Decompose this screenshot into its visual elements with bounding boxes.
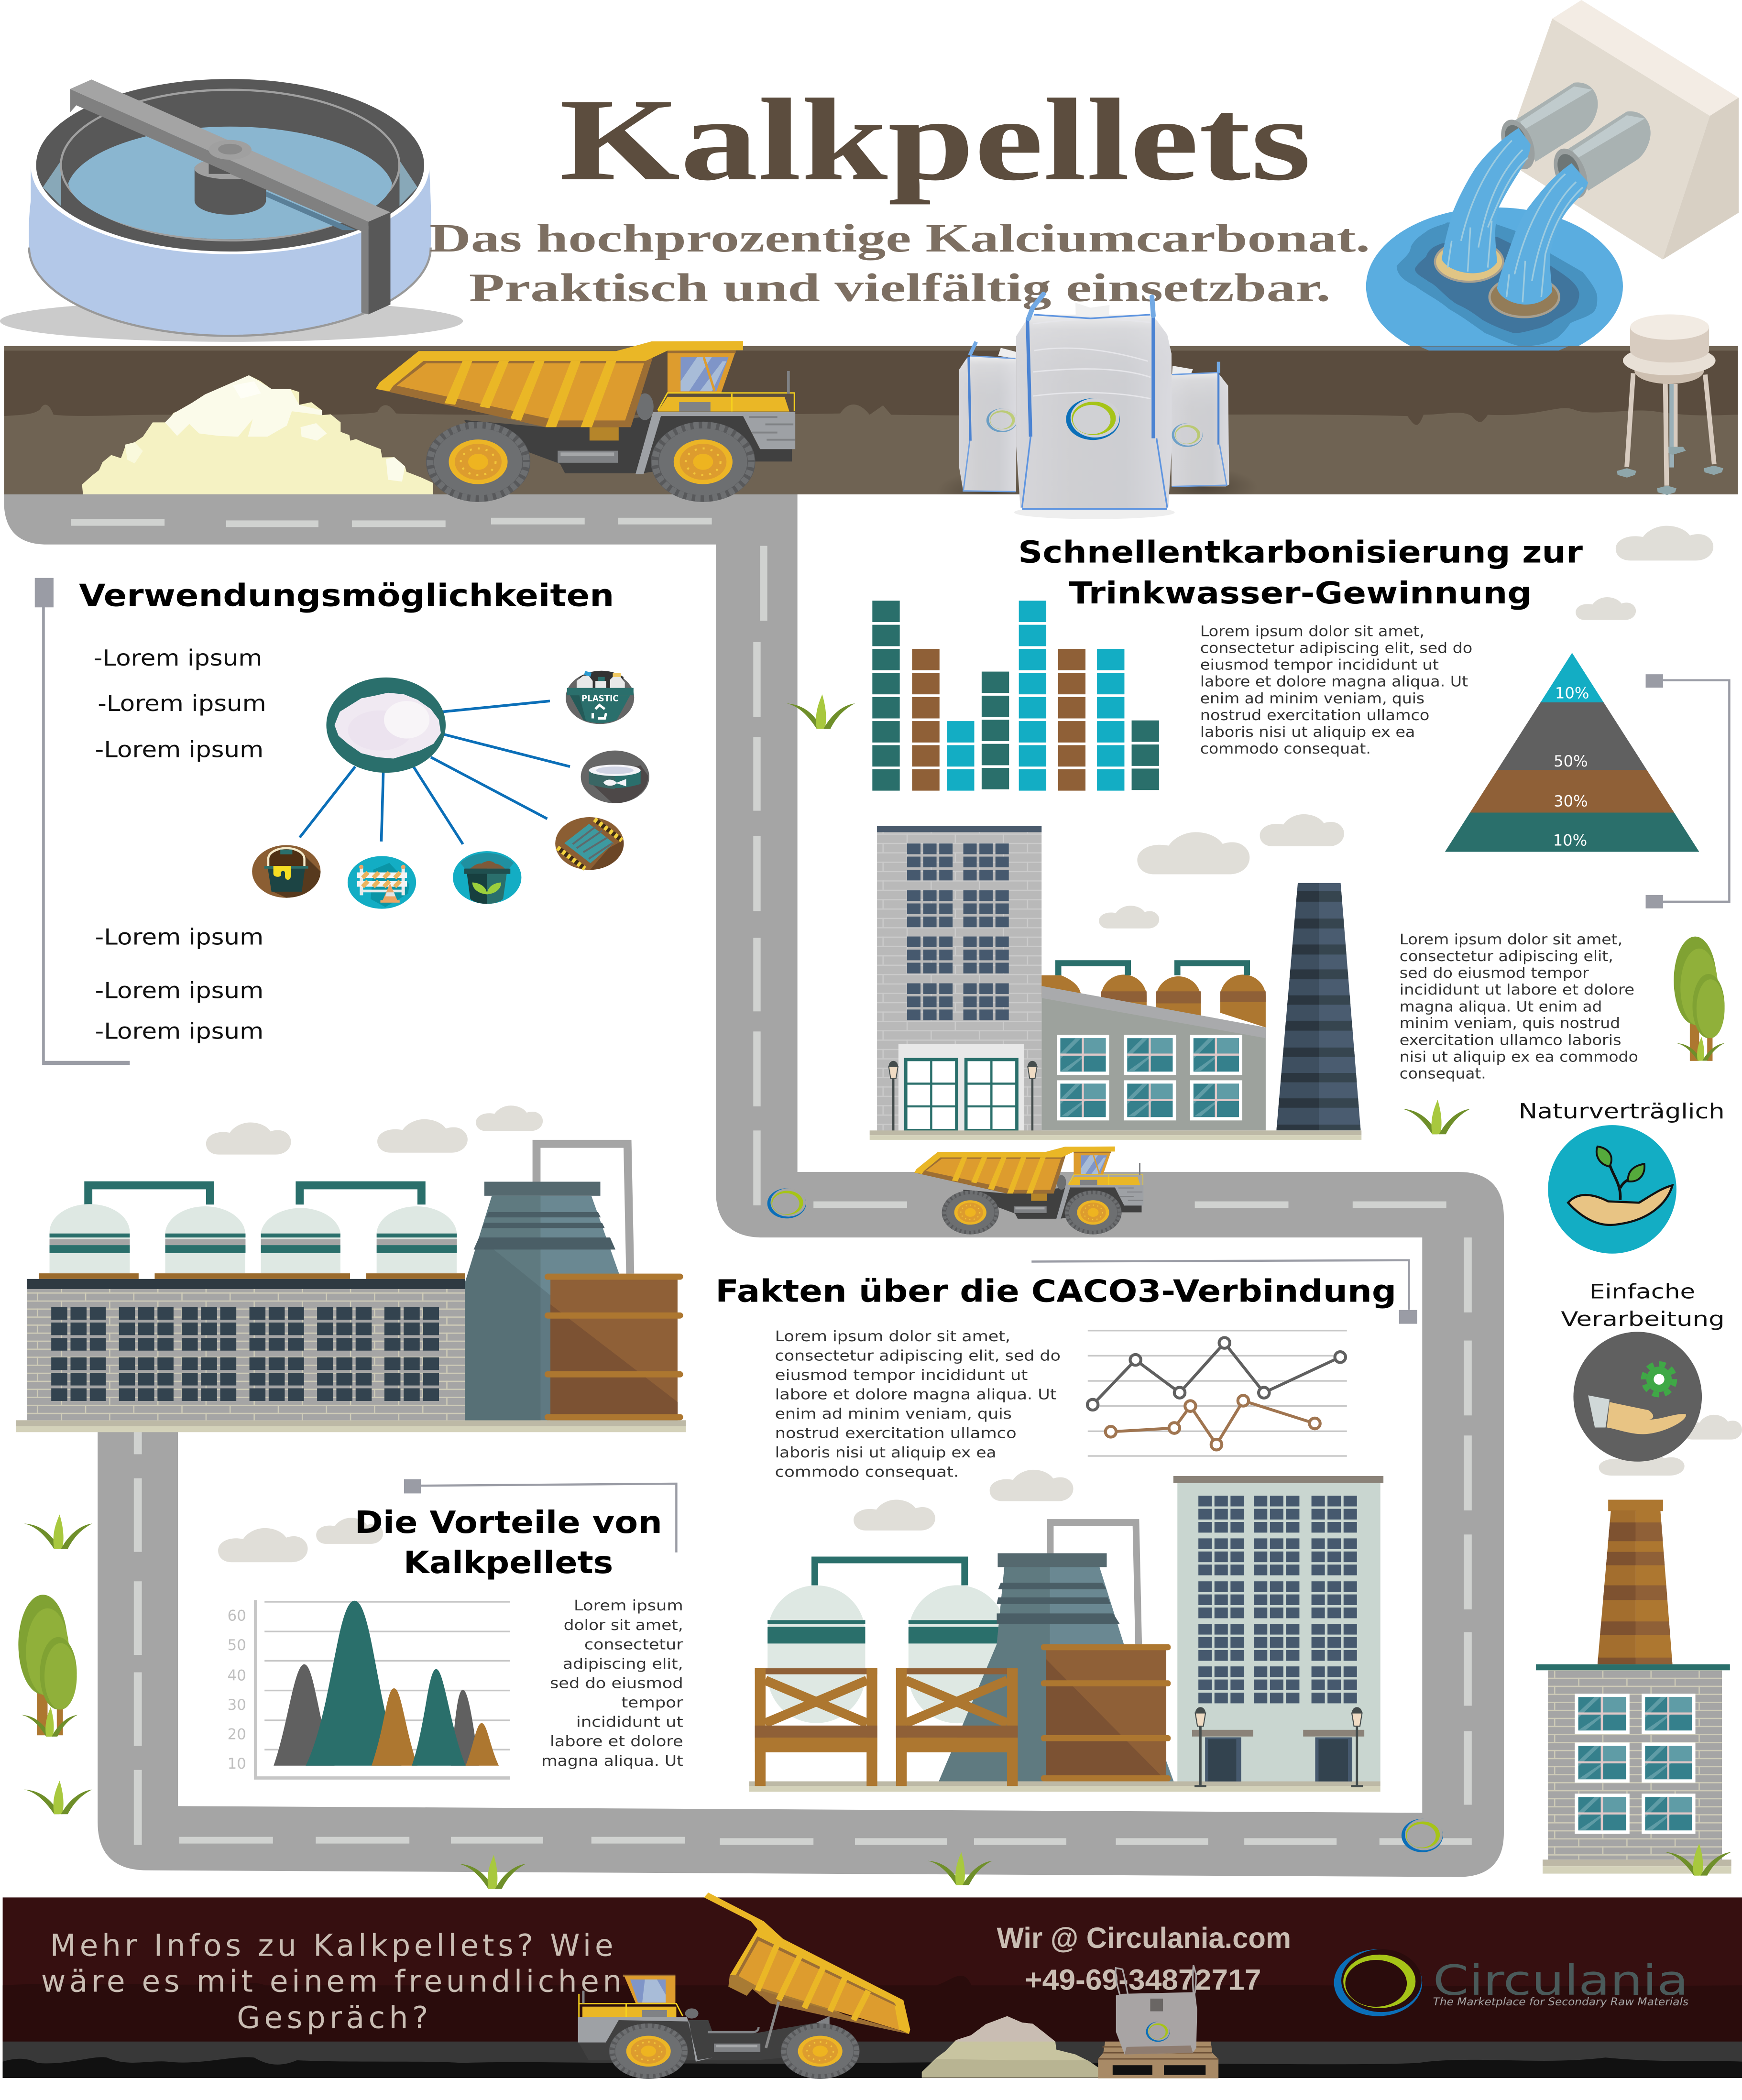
- icon: plastic: PLASTIC: [581, 694, 619, 704]
- text block: consectetur adipiscing elit, sed do: [775, 1348, 1061, 1365]
- road lane markings: [71, 518, 1472, 1845]
- icon: carpet: [555, 817, 624, 870]
- heading: [354, 1505, 662, 1581]
- illustration: wastewater outfall: [1366, 0, 1739, 365]
- pyramid chart: 30%: [1554, 792, 1588, 810]
- footer call to action: wäre es mit einem freundlichen: [41, 1964, 622, 1999]
- heading: Verwendungsmöglichkeiten: [79, 578, 614, 613]
- big bags: [937, 303, 1258, 519]
- list: -Lorem ipsum: [95, 924, 263, 950]
- icon: hand with plant: [1548, 1125, 1676, 1254]
- text block: sed do eiusmod tempor: [1400, 965, 1589, 982]
- list: -Lorem ipsum: [98, 690, 266, 716]
- pyramid chart: 50%: [1554, 752, 1588, 770]
- road: [4, 493, 1504, 1877]
- heading: Kalkpellets: [404, 1545, 613, 1581]
- footer contact: [997, 1922, 1291, 1996]
- text block: consectetur: [584, 1636, 683, 1653]
- list: -Lorem ipsum: [94, 645, 262, 671]
- pellet pile: [922, 2016, 1102, 2078]
- bracket: [35, 578, 130, 1065]
- panel: Die Vorteile von Kalkpellets: [228, 1479, 683, 1778]
- grass tuft: [1665, 1844, 1731, 1876]
- Circulania logo: [1334, 1949, 1688, 2016]
- Circulania logo: The Marketplace for Secondary Raw Materials: [1433, 1996, 1688, 2008]
- connector lines: [300, 701, 570, 844]
- heading: [1018, 535, 1583, 611]
- pyramid chart: 10%: [1555, 684, 1589, 702]
- text block: adipiscing elit,: [563, 1656, 683, 1673]
- text block: labore et dolore magna aliqua. Ut: [1200, 674, 1468, 690]
- label: Naturverträglich: Naturverträglich: [1519, 1100, 1725, 1124]
- footer band: [3, 1897, 1742, 2078]
- label: Einfache Verarbeitung: Einfache: [1589, 1280, 1695, 1303]
- bracket: [404, 1479, 676, 1553]
- text block: incididunt ut: [576, 1714, 683, 1731]
- factory: left plant: [16, 1144, 686, 1432]
- illustration: clarifier tank: [0, 77, 463, 342]
- area chart: [228, 1600, 510, 1778]
- footer contact: Wir @ Circulania.com: [997, 1922, 1291, 1955]
- area chart: 60: [228, 1608, 246, 1625]
- icon: plant substrate: [453, 851, 521, 904]
- clouds: [206, 526, 1742, 1562]
- icon: powder centre: [326, 678, 446, 773]
- text block: enim ad minim veniam, quis: [1200, 690, 1424, 707]
- text block: [1200, 623, 1472, 757]
- bracket: [1646, 674, 1729, 908]
- text block: magna aliqua. Ut: [541, 1753, 683, 1770]
- list: -Lorem ipsum: [95, 1018, 263, 1044]
- footer call to action: Mehr Infos zu Kalkpellets? Wie: [50, 1928, 614, 1963]
- text block: [541, 1597, 683, 1770]
- icon: food tin: [581, 751, 649, 803]
- text block: laboris nisi ut aliquip ex ea: [1200, 724, 1415, 741]
- heading: Die Vorteile von: [354, 1505, 662, 1541]
- text block: laboris nisi ut aliquip ex ea: [775, 1444, 997, 1461]
- footer contact: +49-69-34872717: [1025, 1963, 1261, 1996]
- area chart: 10: [228, 1755, 246, 1772]
- trees: [18, 937, 1725, 1735]
- heading: Fakten über die CACO3-Verbindung: [715, 1273, 1396, 1309]
- area chart: 30: [228, 1696, 246, 1714]
- footer call to action: Gespräch?: [237, 2001, 428, 2035]
- small dump truck on road: [914, 1147, 1143, 1235]
- subtitle: Praktisch und vielfältig einsetzbar.: [469, 266, 1331, 310]
- factory: tanks, silo and tall building: [749, 1476, 1383, 1792]
- list: [94, 645, 266, 1044]
- pyramid chart: [1445, 653, 1699, 852]
- icon: hand with gear: [1573, 1332, 1702, 1462]
- heading: Trinkwasser-Gewinnung: [1069, 576, 1532, 611]
- text block: sed do eiusmod: [550, 1675, 683, 1692]
- label: Einfache Verarbeitung: [1561, 1280, 1725, 1331]
- grass tufts: [22, 694, 1725, 1889]
- text block: enim ad minim veniam, quis: [775, 1406, 1012, 1422]
- text block: nostrud exercitation ullamco: [775, 1425, 1017, 1442]
- pyramid chart: 10%: [1553, 831, 1587, 849]
- area chart: 40: [228, 1667, 246, 1684]
- panel: Fakten: [715, 1260, 1417, 1792]
- text block: Lorem ipsum dolor sit amet,: [1400, 931, 1622, 948]
- dump truck on ground: [376, 341, 795, 502]
- factory: tower and hall: [870, 826, 1365, 1140]
- text block: labore et dolore: [550, 1733, 683, 1750]
- text block: commodo consequat.: [1200, 741, 1371, 757]
- footer call to action: [41, 1928, 622, 2035]
- tipping dump truck: [578, 1892, 910, 2079]
- icon: paint bucket: [252, 845, 320, 898]
- text block: dolor sit amet,: [564, 1617, 683, 1634]
- text block: consectetur adipiscing elit,: [1400, 948, 1613, 965]
- text block: exercitation ullamco laboris: [1400, 1032, 1621, 1049]
- factory: right chimney building: [1536, 1500, 1731, 1874]
- line chart: [1087, 1331, 1347, 1456]
- road logo marker: [1402, 1819, 1443, 1852]
- road logo marker: [767, 1188, 806, 1218]
- subtitle: [429, 216, 1370, 310]
- text block: labore et dolore magna aliqua. Ut: [775, 1386, 1057, 1403]
- bag handles above subtitle: [1029, 294, 1153, 318]
- heading: Schnellentkarbonisierung zur: [1018, 535, 1583, 570]
- panel: Schnellentkarbonisierung: [872, 535, 1729, 1083]
- subtitle: Das hochprozentige Kalciumcarbonat.: [429, 216, 1370, 261]
- ground band: [4, 346, 1738, 494]
- water tower: [1617, 315, 1723, 495]
- lime pile: [82, 375, 433, 494]
- bracket: [1031, 1260, 1417, 1324]
- text block: Lorem ipsum: [574, 1597, 683, 1614]
- text block: commodo consequat.: [775, 1464, 959, 1480]
- text block: magna aliqua. Ut enim ad: [1400, 998, 1602, 1015]
- Circulania logo: Circulania: [1433, 1957, 1688, 2005]
- label: Einfache Verarbeitung: Verarbeitung: [1561, 1307, 1725, 1331]
- text block: consequat.: [1400, 1066, 1486, 1083]
- text block: eiusmod tempor incididunt ut: [775, 1367, 1028, 1384]
- pallet with big bag: [1098, 1965, 1218, 2078]
- icon: plastic: [566, 671, 634, 724]
- area chart: 20: [228, 1726, 246, 1743]
- text block: consectetur adipiscing elit, sed do: [1200, 640, 1472, 656]
- text block: incididunt ut labore et dolore: [1400, 982, 1634, 998]
- panel: Verwendungsmöglichkeiten: [35, 578, 649, 1065]
- area chart: 50: [228, 1637, 246, 1654]
- title: Kalkpellets: [559, 75, 1311, 205]
- text block: nostrud exercitation ullamco: [1200, 707, 1429, 724]
- text block: tempor: [621, 1695, 683, 1711]
- text block: [775, 1328, 1061, 1480]
- text block: Lorem ipsum dolor sit amet,: [775, 1328, 1010, 1345]
- icon: road barrier: [348, 856, 416, 909]
- text block: minim veniam, quis nostrud: [1400, 1015, 1620, 1032]
- list: -Lorem ipsum: [95, 977, 263, 1003]
- list: -Lorem ipsum: [95, 737, 263, 763]
- text block: Lorem ipsum dolor sit amet,: [1200, 623, 1424, 640]
- text block: [1400, 931, 1638, 1083]
- text block: eiusmod tempor incididunt ut: [1200, 657, 1439, 674]
- bar chart: [872, 601, 1159, 791]
- text block: nisi ut aliquip ex ea commodo: [1400, 1049, 1638, 1065]
